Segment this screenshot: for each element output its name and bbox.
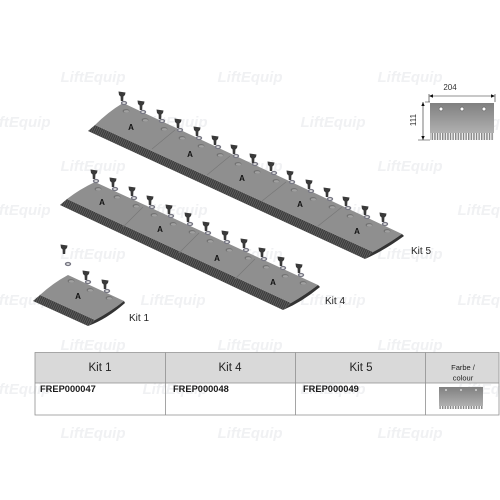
kit 5 assembly: A <box>239 174 245 183</box>
watermarks: LiftEquip <box>141 292 205 309</box>
kit 4 assembly: A <box>270 278 276 287</box>
header: Kit 1: Kit 1 <box>88 362 112 374</box>
label: Kit 5: Kit 5 <box>411 246 431 257</box>
height dimension arrow <box>421 102 425 140</box>
kit 5 plate surface <box>95 103 402 252</box>
header: Kit 5: Kit 5 <box>349 362 373 374</box>
watermarks: LiftEquip <box>301 202 365 219</box>
kit 5 assembly: A <box>354 227 360 236</box>
label: Kit 1: Kit 1 <box>129 313 149 324</box>
kit 4 plate surface <box>67 182 318 303</box>
watermarks: LiftEquip <box>61 425 125 442</box>
kit 4 assembly: A <box>214 254 220 263</box>
kit 4 assembly: A <box>99 198 105 207</box>
watermarks: LiftEquip <box>218 69 282 86</box>
watermarks: LiftEquip <box>301 114 365 131</box>
table header row <box>35 352 499 383</box>
watermarks: LiftEquip <box>301 292 365 309</box>
label: Kit 4: Kit 4 <box>325 296 345 307</box>
kit 4 assembly <box>60 170 320 310</box>
watermarks: LiftEquip <box>218 158 282 175</box>
part number kit 5: FREP000049 <box>303 384 359 394</box>
plate front view <box>430 103 494 133</box>
kit 4 comb teeth <box>60 199 291 310</box>
kit 5 comb teeth <box>88 125 373 259</box>
watermarks: LiftEquip <box>218 246 282 263</box>
watermarks <box>0 69 500 442</box>
table <box>35 352 499 415</box>
dimension drawing <box>409 83 495 140</box>
header: Farbe / colour: colour <box>453 374 474 382</box>
part number kit 4: FREP000048 <box>173 384 229 394</box>
watermarks: LiftEquip <box>378 69 442 86</box>
watermarks: LiftEquip <box>301 381 365 398</box>
watermarks: LiftEquip <box>143 202 207 219</box>
watermarks: LiftEquip <box>378 158 442 175</box>
kit 5 assembly: A <box>187 150 193 159</box>
watermarks: LiftEquip <box>61 337 125 354</box>
watermarks: LiftEquip <box>218 425 282 442</box>
kit 1 assembly: A <box>75 292 81 301</box>
watermarks: LiftEquip <box>61 158 125 175</box>
watermarks: LiftEquip <box>143 114 207 131</box>
dimension 111: 111 <box>409 113 418 126</box>
kit 1 comb teeth <box>33 295 95 326</box>
watermarks: LiftEquip <box>378 246 442 263</box>
watermarks: LiftEquip <box>218 337 282 354</box>
header: Kit 4: Kit 4 <box>218 362 242 374</box>
watermarks: LiftEquip <box>61 246 125 263</box>
table grid <box>35 352 499 415</box>
dimension 204: 204 <box>443 83 457 92</box>
watermarks: LiftEquip <box>61 69 125 86</box>
kit 4 assembly: A <box>157 225 163 234</box>
colour swatch <box>439 387 483 409</box>
kit 1 plate surface <box>40 275 124 320</box>
part number kit 1: FREP000047 <box>40 384 96 394</box>
kit 5 assembly: A <box>297 200 303 209</box>
kit 1 assembly <box>33 244 125 326</box>
header: Farbe / colour: Farbe / <box>451 363 475 372</box>
watermarks: LiftEquip <box>143 381 207 398</box>
watermarks: LiftEquip <box>378 425 442 442</box>
watermarks: LiftEquip <box>378 337 442 354</box>
kit 5 assembly <box>88 92 404 259</box>
kit 5 assembly: A <box>128 123 134 132</box>
width dimension arrow <box>418 94 495 140</box>
